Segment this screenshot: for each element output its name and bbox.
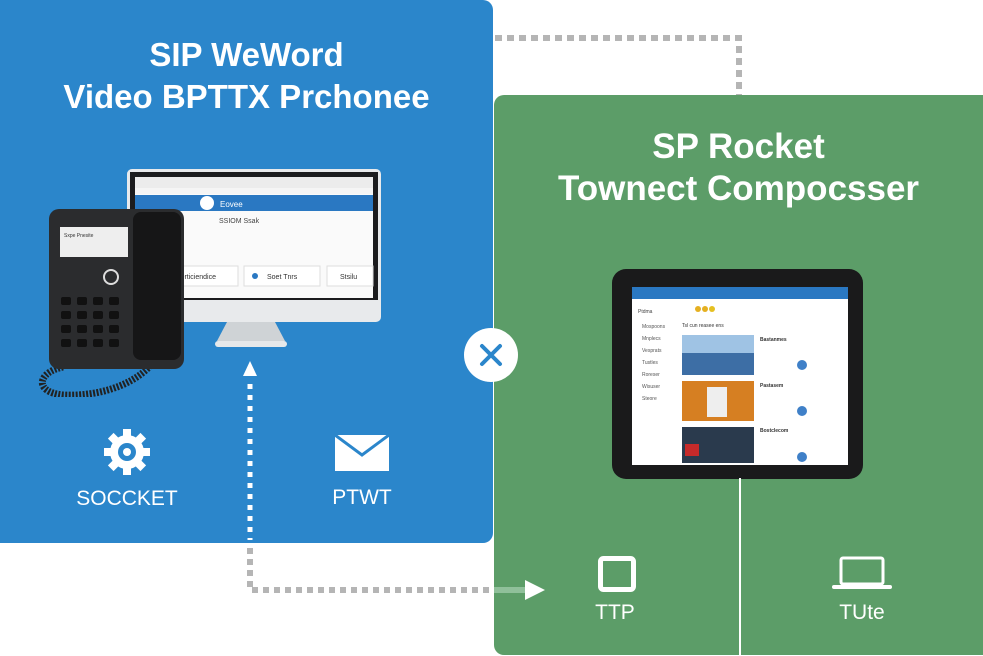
illustration: monitor: Soet Tnrs — [267, 274, 298, 281]
illustration: tablet — [612, 269, 863, 479]
illustration: tablet: Roreser — [642, 372, 660, 378]
illustration: desk phone: Sxpe Pnesite — [64, 233, 94, 239]
icon: gear — [104, 429, 150, 475]
illustration: tablet: Bastanmes — [760, 337, 787, 343]
illustration: tablet: Tustles — [642, 360, 658, 366]
title: right: SP Rocket — [652, 127, 825, 166]
icon: X circle — [464, 328, 518, 382]
icon: envelope — [335, 435, 389, 471]
illustration: tablet: Tsl cun reasee ens — [682, 323, 724, 329]
panel: left blue — [0, 0, 493, 543]
illustration: tablet: Ptdma — [638, 309, 653, 315]
illustration: tablet: Vesprats — [642, 348, 662, 354]
illustration: tablet: Steore — [642, 396, 657, 402]
icon: tablet outline — [598, 556, 636, 592]
label: PTWT: PTWT — [332, 486, 392, 509]
label: SOCCKET: SOCCKET — [76, 487, 178, 510]
illustration: monitor: Stsilu — [340, 274, 357, 281]
illustration: monitor — [127, 169, 381, 347]
label: TTP: TTP — [595, 601, 635, 624]
illustration: tablet: Pastasem — [760, 383, 784, 389]
title: left: SIP WeWord — [149, 36, 344, 73]
illustration: monitor: SSIOM Ssak — [219, 218, 260, 225]
title: left: Video BPTTX Prchonee — [63, 78, 430, 115]
title: right — [558, 127, 919, 208]
illustration: tablet: Mnplecs — [642, 336, 661, 342]
illustration: monitor: Eovee — [220, 200, 243, 209]
title: left — [63, 36, 430, 115]
illustration: monitor: Orticiendice — [179, 274, 216, 281]
illustration: tablet: Wisuser — [642, 384, 660, 390]
illustration: tablet: Mospoons — [642, 324, 666, 330]
illustration: desk phone — [38, 209, 184, 397]
connector: white vertical line from tablet — [739, 478, 741, 656]
icon: laptop — [832, 556, 892, 589]
title: right: Townect Compocsser — [558, 169, 919, 208]
label: TUte: TUte — [839, 601, 885, 624]
panel: right green — [494, 95, 983, 655]
illustration: tablet: Bostclecom — [760, 428, 789, 434]
